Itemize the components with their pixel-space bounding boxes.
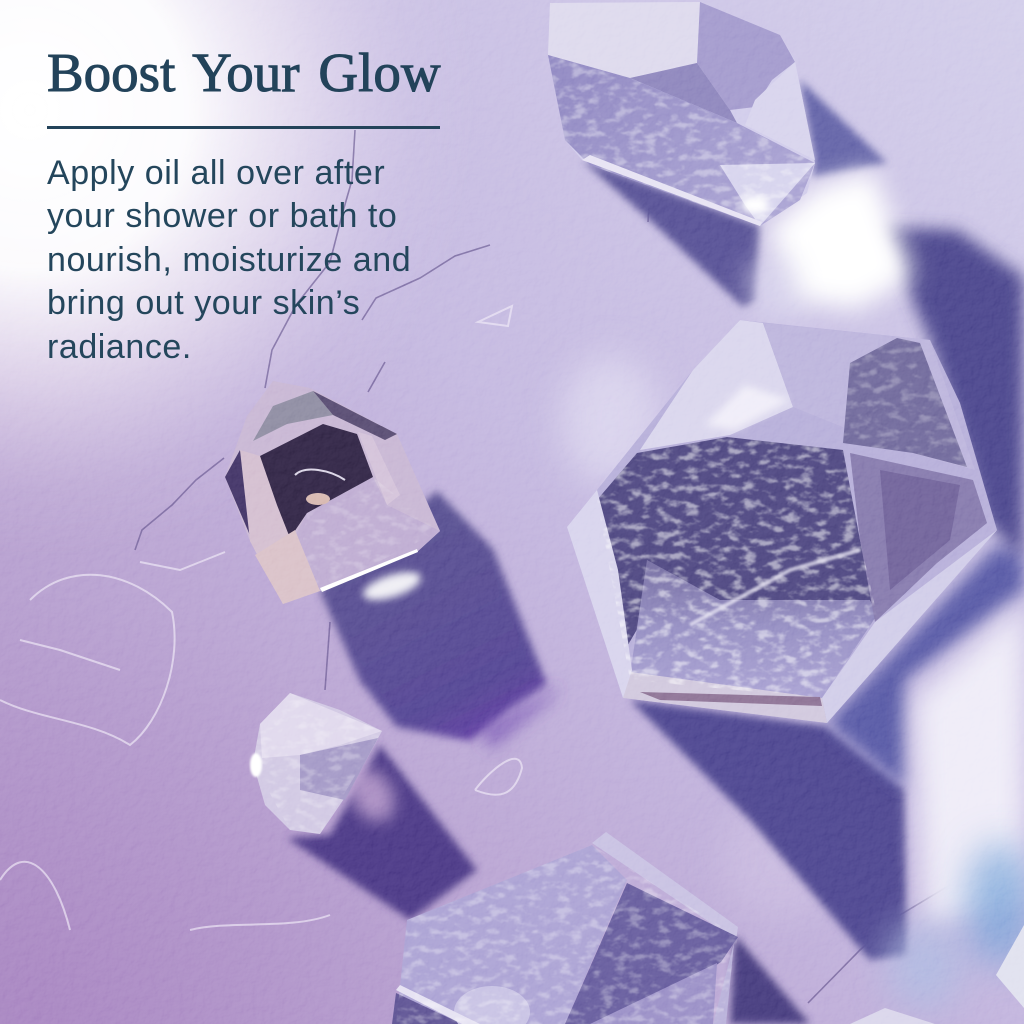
body text: radiance. [47,328,192,366]
raised plaster edges [0,306,522,930]
crystal: small point [225,381,445,604]
crystal: corner fragments [850,925,1024,1024]
title: Boost Your Glow [47,42,441,103]
shadows [287,80,1024,1024]
crystal: large centre right [567,320,997,723]
crystal: small teardrop [250,690,385,835]
title rule [47,126,440,129]
body text: your shower or bath to [47,197,397,235]
crystal: bottom [390,832,740,1024]
surface cracks [135,130,978,1003]
body text: bring out your skin’s [47,284,360,322]
body text: Apply oil all over after [47,154,385,192]
light patches [341,170,1024,1010]
pale light wash [560,355,840,920]
body text: nourish, moisturize and [47,241,411,279]
body text [47,154,411,366]
crystal: top [540,2,820,230]
